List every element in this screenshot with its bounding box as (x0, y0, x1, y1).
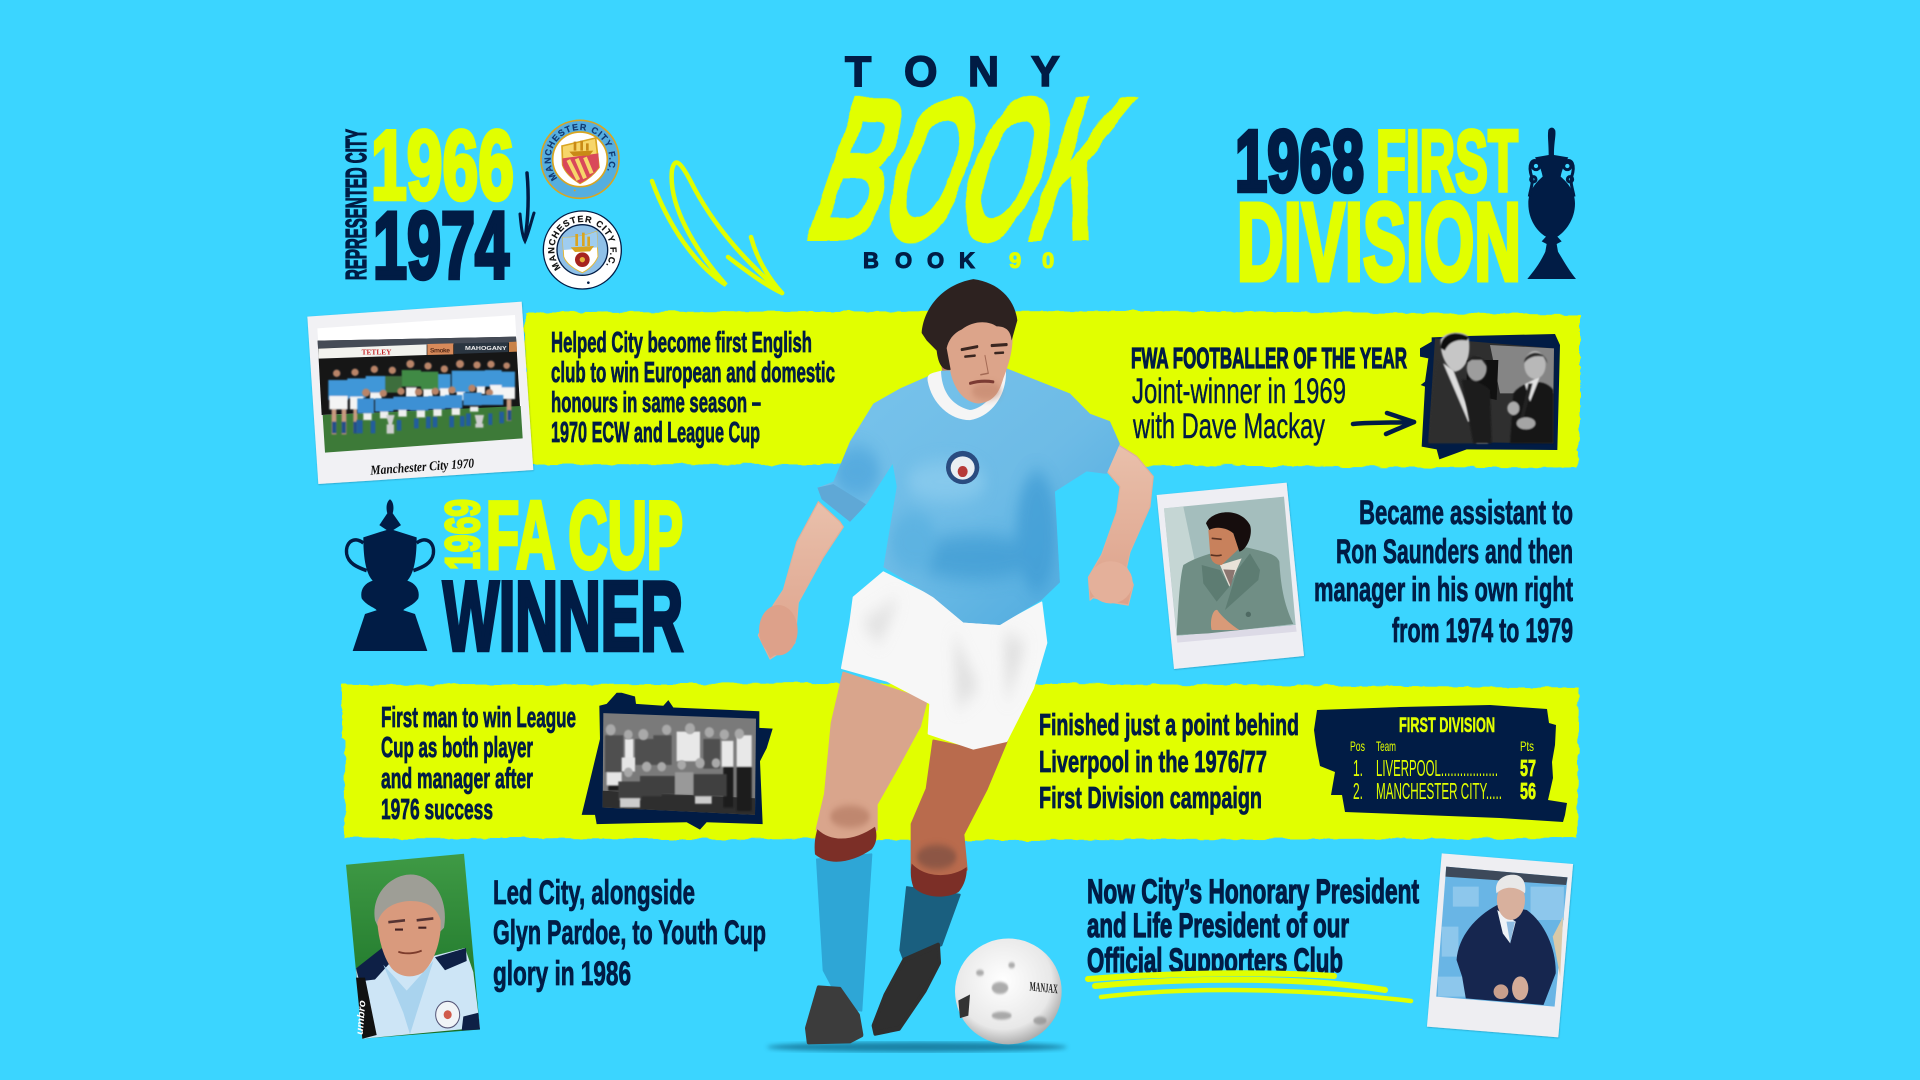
title: TONY: TONY (845, 48, 1060, 96)
text: European and domestic honours: 1970 ECW and League Cup (551, 417, 760, 449)
player shadow (767, 1042, 1067, 1052)
text: became assistant manager: Became assistant to (1359, 494, 1573, 532)
text: Honorary President: Official Supporters Club (1087, 942, 1343, 980)
rotated year: 1969 (437, 499, 490, 570)
text: became assistant manager: from 1974 to 1979 (1392, 612, 1573, 650)
panel: First Division table (1314, 705, 1567, 822)
icon: FA Cup trophy (346, 499, 434, 651)
ad boards text: Smoke (430, 348, 450, 355)
text: Honorary President (1087, 873, 1419, 980)
title: BOOK brush lettering: BOOK (795, 55, 1148, 284)
title: BOOK 90: 90 (1009, 248, 1054, 273)
table row: Manchester City: 2. (1353, 778, 1363, 804)
badge: 1974 club crest: MANCHESTER CITY F.C. (548, 216, 617, 271)
text: finished behind Liverpool (1039, 707, 1299, 815)
year 1966: 1966 (371, 110, 514, 220)
polaroid: assistant manager portrait (1157, 483, 1304, 669)
left man (1428, 333, 1488, 443)
year 1974: 1974 (373, 193, 509, 299)
WINNER: WINNER (443, 561, 683, 671)
photo: Tony Book in training jacket: umbro (354, 999, 368, 1035)
text: Youth Cup glory (493, 874, 766, 993)
badge: 1966 club crest: MANCHESTER CITY F.C. (544, 124, 616, 182)
right thigh and calf (912, 741, 1007, 885)
heading: 1968 First Division (1235, 113, 1521, 304)
yellow band: top (525, 311, 1580, 468)
text: became assistant manager (1314, 494, 1573, 650)
title (795, 48, 1148, 284)
jacket (356, 948, 480, 1039)
arrow: down (520, 173, 534, 241)
text: League Cup player and manager: and manager after (381, 763, 533, 795)
yellow band: bottom (342, 683, 1579, 840)
left sock (817, 854, 872, 1011)
table row: Liverpool: 1. (1353, 755, 1363, 781)
text: Youth Cup glory: Led City, alongside (493, 874, 695, 912)
text: League Cup player and manager: Cup as both player (381, 732, 533, 764)
text: League Cup player and manager (381, 702, 576, 826)
text: FWA Footballer of the Year (1131, 343, 1407, 446)
text: European and domestic honours: honours in same season – (551, 387, 761, 419)
table row: Manchester City: 56 (1520, 778, 1536, 804)
1968: 1968 (1235, 113, 1364, 210)
table row: Liverpool: 57 (1520, 755, 1536, 781)
front row (618, 758, 727, 807)
scribble underline (1088, 973, 1411, 1001)
photo: FWA award winners (1420, 333, 1560, 459)
right sock cuff (911, 863, 967, 897)
left boot (807, 988, 862, 1042)
left sock cuff (815, 827, 876, 862)
right man (1507, 351, 1553, 443)
man in dark coat (1457, 875, 1556, 1005)
text: League Cup player and manager: First man to win League (381, 702, 576, 734)
middle man (1462, 356, 1492, 443)
text: FWA Footballer of the Year: Joint-winner in 1969 (1132, 372, 1346, 411)
right arm (1088, 444, 1153, 605)
neck (940, 356, 1003, 414)
hair (374, 874, 445, 939)
ad boards text: TETLEY (362, 347, 392, 356)
text: became assistant manager: Ron Saunders and then (1336, 533, 1573, 571)
text: finished behind Liverpool: Liverpool in the 1976/77 (1039, 744, 1267, 779)
right boot (873, 945, 939, 1033)
polaroid: Honorary President (1427, 853, 1573, 1037)
text: finished behind Liverpool: Finished just a point behind (1039, 707, 1299, 742)
head (377, 901, 441, 976)
facial features (962, 345, 1007, 383)
table row: Manchester City (1353, 778, 1536, 804)
caption: Manchester City 1970 (369, 455, 475, 478)
polaroid: Manchester City 1970 team (307, 302, 533, 484)
hair (922, 279, 1017, 370)
table header: Team (1376, 738, 1396, 754)
title: BOOK 90: BOOK (863, 248, 975, 273)
DIVISION: DIVISION (1237, 181, 1521, 304)
team: front row (357, 393, 504, 434)
left arm (758, 502, 843, 659)
badge: 1974 club crest (542, 210, 622, 290)
photo: 1976 League Cup celebration (582, 693, 773, 830)
heads (606, 723, 744, 777)
text: Youth Cup glory: Glyn Pardoe, to Youth Cup (493, 914, 766, 952)
face (945, 310, 1013, 404)
table row: Liverpool: LIVERPOOL.................. (1376, 755, 1498, 781)
left thigh (817, 673, 927, 842)
text: became assistant manager: manager in his own right (1314, 571, 1573, 609)
scribble arrow (652, 163, 782, 293)
ball: MANJAX (1029, 980, 1058, 997)
ad boards text (362, 346, 507, 356)
player: Tony Book (758, 279, 1153, 1044)
text: Youth Cup glory: glory in 1986 (493, 955, 631, 993)
text: FWA Footballer of the Year: FWA FOOTBALLER OF THE YEAR (1131, 343, 1407, 375)
text: League Cup player and manager: 1976 success (381, 794, 493, 826)
text: Honorary President: and Life President of our (1087, 907, 1349, 945)
FIRST: FIRST (1376, 113, 1518, 210)
ad boards text: MAHOGANY (465, 346, 507, 352)
text: finished behind Liverpool: First Division campaign (1039, 780, 1262, 815)
table row: Manchester City: MANCHESTER CITY..... (1376, 778, 1502, 804)
table header (1350, 738, 1534, 754)
icon: league trophy (1527, 128, 1576, 279)
shirt (817, 368, 1120, 625)
team: heads (333, 360, 510, 397)
text: European and domestic honours: Helped City become first English (551, 327, 812, 359)
FA CUP: FA CUP (486, 482, 683, 589)
table header: Pts (1520, 738, 1534, 754)
table title: FIRST DIVISION (1399, 714, 1495, 737)
collar (928, 370, 1006, 420)
years represented (341, 110, 534, 299)
heading: 1969 FA Cup winner (437, 482, 683, 671)
arrow: to FWA photo (1353, 413, 1414, 434)
text: Honorary President: Now City’s Honorary President (1087, 873, 1419, 911)
shirt crest (946, 451, 979, 484)
table row: Liverpool (1353, 755, 1536, 781)
title: BOOK 90 (863, 248, 1054, 273)
ball (955, 939, 1062, 1044)
team: back row (328, 370, 515, 434)
photo: Tony Book in training jacket (346, 854, 480, 1039)
text: FWA Footballer of the Year: with Dave Mackay (1132, 407, 1325, 446)
text: European and domestic honours (551, 327, 835, 449)
table header: Pos (1350, 738, 1365, 754)
text: European and domestic honours: club to win European and domestic (551, 357, 835, 389)
right sock (900, 887, 960, 959)
back row (605, 732, 752, 811)
shorts (842, 572, 1047, 749)
man in grey coat (1177, 512, 1293, 635)
table brush background (1314, 705, 1567, 822)
